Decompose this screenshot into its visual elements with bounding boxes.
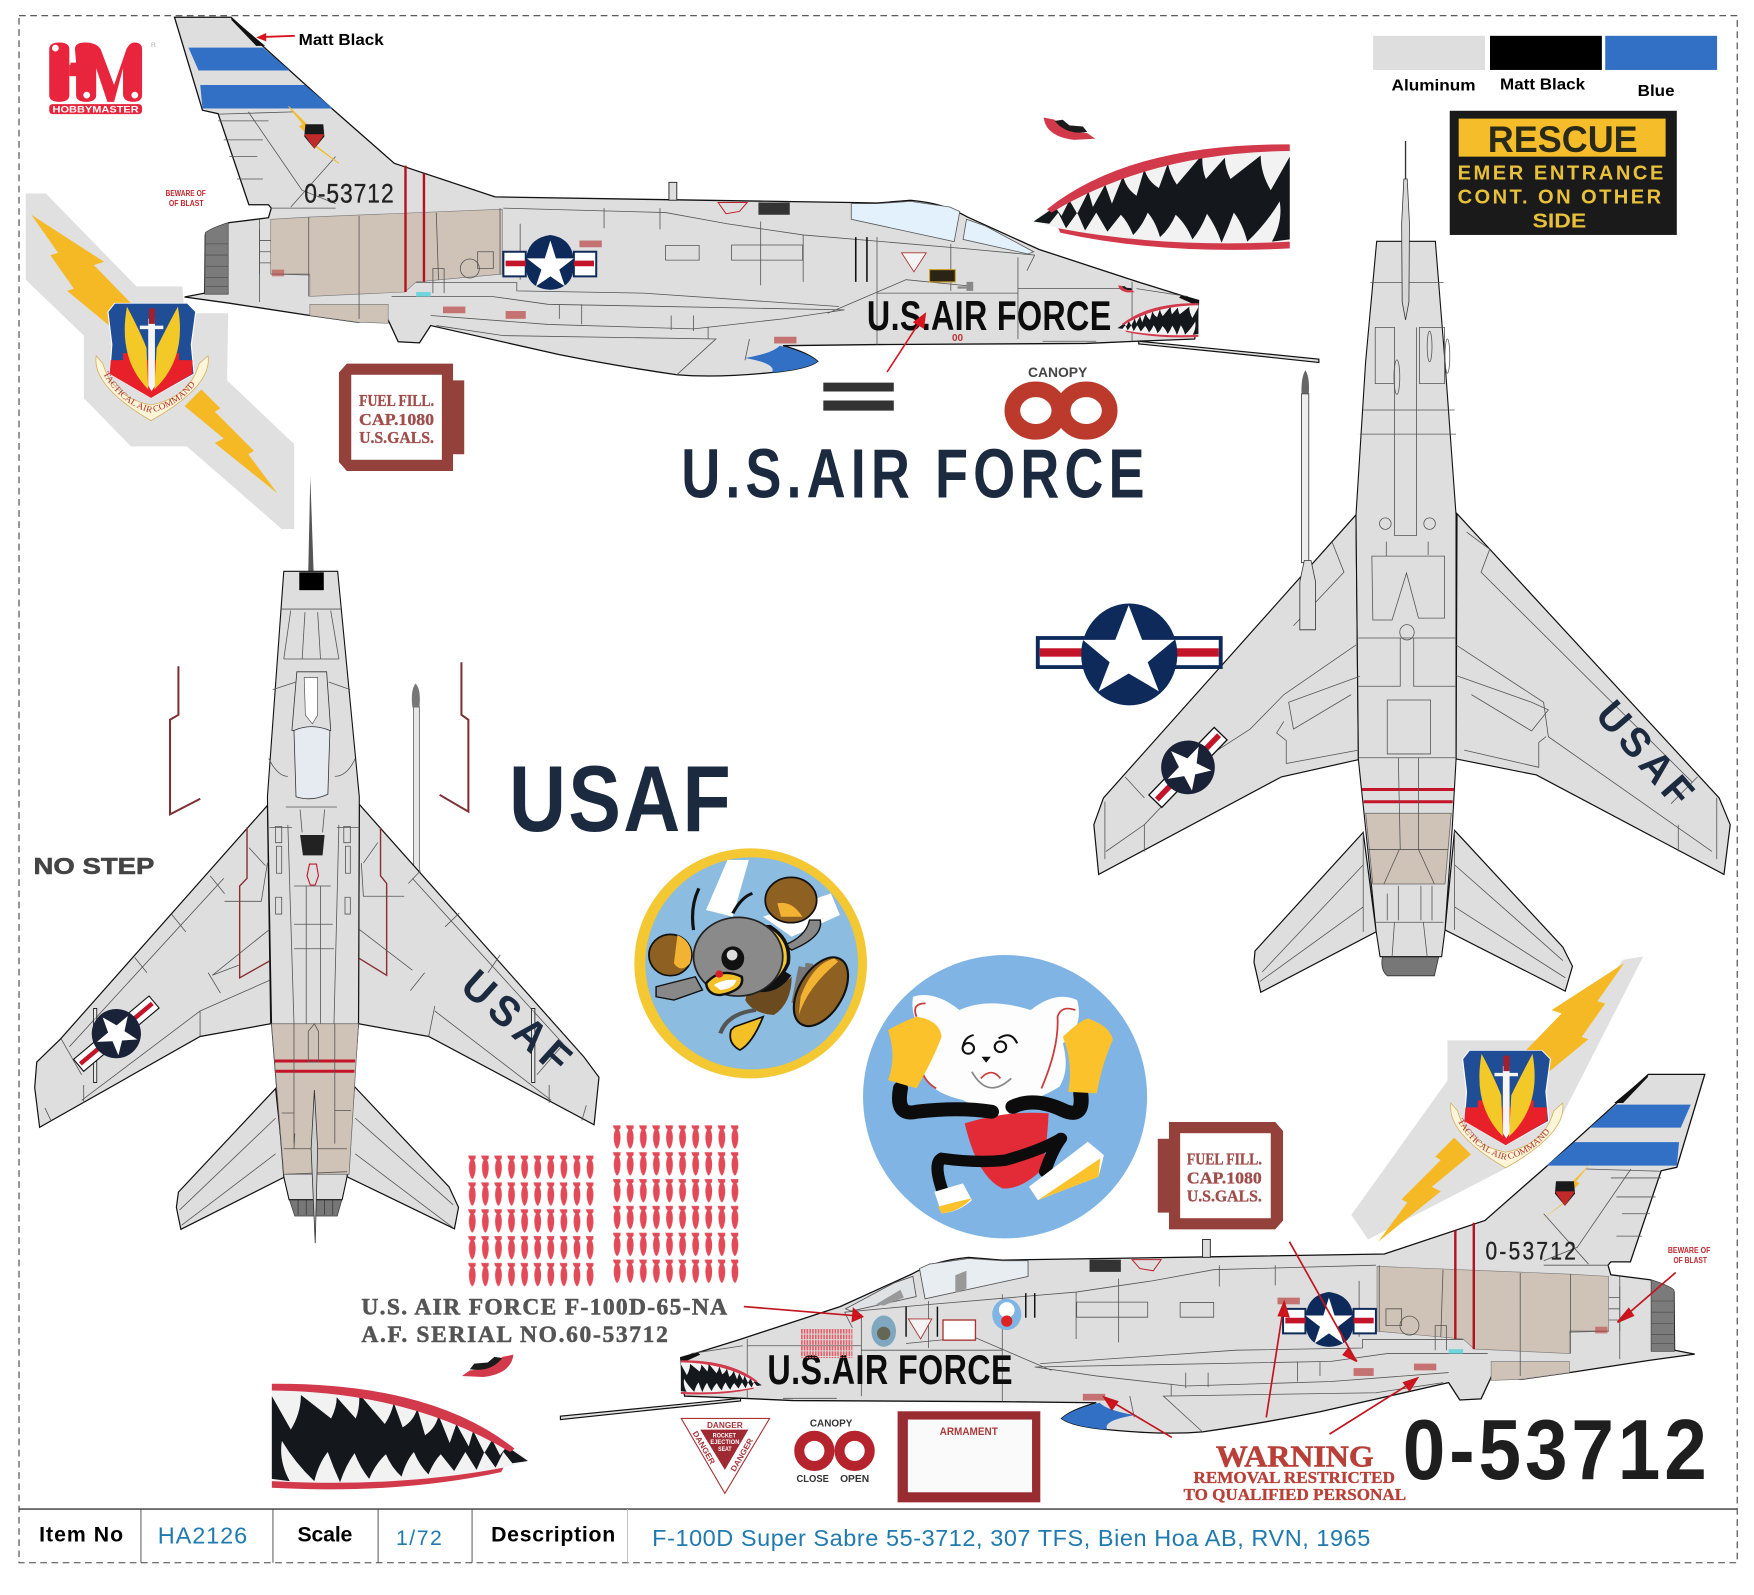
danger ejection seat triangle — [681, 1418, 770, 1493]
bottom jet: mini bee badge — [871, 1316, 896, 1347]
bomb mission tally — [465, 1124, 741, 1289]
beware of blast note: OF BLAST — [169, 198, 204, 208]
TAC emblem decal (left) — [26, 194, 294, 529]
red arrow to fuselage lettering — [887, 312, 926, 372]
logo: Hobbymaster — [49, 42, 156, 114]
top view: red bands — [275, 1061, 355, 1071]
item number value: HA2126 — [158, 1523, 247, 1549]
canopy marking (top): CANOPY — [1028, 365, 1087, 380]
top view: wing tip struts — [94, 1008, 535, 1082]
info table — [19, 1509, 1737, 1563]
top view: windscreen — [304, 677, 318, 724]
fuel fill placard (top): CAP.1080 — [359, 410, 434, 429]
colour swatches: Matt Black — [1500, 77, 1585, 94]
top view: antenna head — [412, 684, 420, 707]
mini rescue placard — [930, 270, 955, 282]
underside: right tailplane — [1445, 830, 1572, 991]
warning placard: REMOVAL RESTRICTED — [1194, 1468, 1395, 1487]
underside: tan heat-stained panel — [1366, 813, 1451, 884]
bottom jet: canopy pane — [920, 1258, 1028, 1299]
beware of blast note — [166, 188, 206, 208]
shark mouth decal (top) — [1034, 144, 1290, 250]
fin serial number: 0-53712 — [304, 179, 394, 209]
bottom jet: shark mouth — [681, 1360, 762, 1395]
scale value: 1/72 — [396, 1526, 442, 1550]
danger ejection seat triangle: DANGER — [691, 1429, 717, 1466]
canopy close/open marking: OPEN — [840, 1474, 869, 1485]
rescue placard: SIDE — [1533, 211, 1586, 233]
danger ejection seat triangle: ROCKET — [713, 1432, 736, 1439]
underside: left tailplane — [1254, 832, 1376, 992]
danger ejection seat triangle: DANGER — [729, 1436, 755, 1473]
nose eye decal — [1118, 285, 1135, 292]
warning placard — [1184, 1440, 1406, 1504]
fin shield — [304, 124, 324, 149]
underside: red bands — [1362, 790, 1454, 802]
underside: wing roundel — [1136, 715, 1240, 820]
red pointer arrows — [744, 1242, 1676, 1437]
TAC emblem decal (left): TACTICAL AIR COMMAND — [104, 370, 194, 413]
equals stencil marks — [823, 383, 894, 411]
description label: Description — [491, 1522, 615, 1546]
large lettering: USAF: USAF — [509, 747, 731, 852]
logo: Hobbymaster: R — [151, 42, 156, 49]
top view: panel lines — [45, 609, 586, 1228]
bottom jet: fin bolt — [1540, 1163, 1591, 1220]
top view: side outline decal (right) — [440, 662, 468, 812]
underside: nose probe — [1402, 141, 1409, 320]
mini canopy marking: 00 — [952, 333, 964, 344]
bottom jet: black lines — [906, 1293, 1035, 1337]
beware of blast note: BEWARE OF — [166, 188, 206, 198]
bottom jet: fuselage lettering: U.S.AIR FORCE — [767, 1346, 1013, 1393]
side view aircraft (bottom) — [560, 1074, 1705, 1433]
rescue placard: CONT. ON OTHER — [1458, 187, 1662, 209]
fuel fill placard (bottom): FUEL FILL. — [1187, 1150, 1262, 1169]
underside: fuselage — [1356, 241, 1456, 957]
large serial number: 0-53712 — [1403, 1403, 1707, 1498]
beware of blast note (bottom): BEWARE OF — [1668, 1245, 1710, 1255]
label: matt black arrow: Matt Black — [299, 32, 384, 49]
top view: red hatch outline — [307, 864, 318, 885]
top view: black nose panel — [299, 572, 324, 590]
underside: exhaust — [1382, 957, 1439, 976]
top view: nose probe — [308, 476, 314, 571]
rescue placard: EMER ENTRANCE — [1458, 163, 1663, 185]
panel black lines — [856, 237, 867, 282]
fuel fill placard (top): FUEL FILL. — [359, 391, 434, 410]
canopy close/open marking: CANOPY — [810, 1418, 853, 1429]
top view: wing walkway lines — [240, 827, 387, 978]
shark eye decal (top) — [1044, 117, 1095, 140]
top view: USAF wing lettering: USAF — [452, 960, 581, 1083]
no step marking: NO STEP — [34, 853, 154, 879]
rescue placard — [1450, 111, 1677, 235]
side view aircraft (top) — [175, 17, 1319, 376]
top view: tan heat-stained panel — [272, 1024, 358, 1174]
beware of blast note (bottom) — [1668, 1245, 1710, 1265]
warning placard: TO QUALIFIED PERSONAL — [1184, 1485, 1406, 1504]
description value: F-100D Super Sabre 55-3712, 307 TFS, Bien Hoa AB, RVN, 1965 — [652, 1525, 1370, 1551]
badge: boxing bear — [863, 955, 1147, 1238]
danger ejection seat triangle: EJECTION — [710, 1439, 740, 1446]
fuel fill placard (bottom): CAP.1080 — [1187, 1169, 1262, 1188]
TAC emblem decal (right) — [1352, 956, 1643, 1242]
bottom jet: mini bear badge — [992, 1299, 1021, 1330]
top view: wing roundel — [63, 983, 170, 1084]
fuel fill placard (top): U.S.GALS. — [359, 428, 434, 447]
mini danger triangle — [902, 253, 926, 272]
grey fitting — [958, 282, 973, 291]
colour swatches: Aluminum — [1392, 78, 1475, 95]
top view: hatches — [276, 826, 350, 914]
large lettering: U.S. AIR FORCE: U.S.AIR FORCE — [681, 436, 1145, 513]
danger ejection seat triangle: DANGER — [707, 1420, 743, 1430]
colour swatches: Blue — [1638, 83, 1675, 100]
bottom jet: canopy shadow — [876, 1271, 966, 1305]
underside: right wing — [1456, 514, 1730, 874]
fuselage side text: U.S.AIR FORCE — [867, 292, 1111, 339]
badge: boxing bee — [634, 848, 867, 1078]
top view: wing reference tubes — [414, 706, 419, 878]
armament placard: ARMAMENT — [940, 1426, 998, 1438]
bottom jet: windscreen — [846, 1276, 916, 1311]
canopy marking (top) — [1012, 365, 1110, 432]
large roundel decal — [1036, 604, 1223, 705]
top view: side outline decal (left) — [170, 666, 200, 814]
label: matt black arrow — [256, 32, 384, 49]
top plan view aircraft (left) — [35, 476, 599, 1243]
warning placard: WARNING — [1216, 1440, 1374, 1474]
top view: right tailplane — [347, 1086, 459, 1229]
rescue placard: RESCUE — [1488, 119, 1638, 160]
canopy close/open marking — [796, 1418, 870, 1485]
colour swatches — [1373, 36, 1717, 100]
top view: black panel — [300, 835, 325, 855]
shark mouth decal (bottom) — [272, 1384, 528, 1489]
logo: Hobbymaster: HOBBYMASTER — [53, 104, 139, 114]
top view: right wing — [358, 804, 599, 1125]
fuel fill placard (bottom): U.S.GALS. — [1187, 1186, 1262, 1205]
danger ejection seat triangle: SEAT — [718, 1446, 732, 1453]
top view: tail fin — [311, 1090, 318, 1243]
bottom jet: fin serial: 0-53712 — [1486, 1237, 1576, 1265]
beware of blast note (bottom): OF BLAST — [1673, 1255, 1708, 1265]
TAC emblem decal (right): TACTICAL AIR COMMAND — [1458, 1118, 1549, 1160]
bottom jet: mini bomb tally — [801, 1329, 852, 1358]
underside: panel lines — [1105, 283, 1717, 982]
fuel fill placard (bottom) — [1158, 1122, 1283, 1229]
underside: left wing — [1094, 515, 1358, 874]
fin bolt decal — [289, 106, 339, 163]
underside: USAF wing lettering: USAF — [1587, 691, 1704, 815]
top view: left tailplane — [176, 1089, 285, 1229]
bottom jet: mini armament panel — [943, 1320, 975, 1340]
nose shark mouth decal — [1117, 303, 1198, 337]
underside: lying pitot probe — [1300, 370, 1316, 630]
top view: fuselage — [267, 571, 359, 1200]
item number label: Item No — [39, 1522, 123, 1546]
fuel fill placard (top) — [339, 364, 464, 471]
top view: canopy glazing — [292, 672, 331, 730]
data stencil text — [361, 1294, 727, 1348]
canopy close/open marking: CLOSE — [796, 1474, 829, 1485]
bottom jet: mini danger triangle — [908, 1319, 932, 1339]
top view: canopy glass — [294, 727, 330, 799]
data stencil text: A.F. SERIAL NO.60-53712 — [361, 1322, 668, 1348]
scale label: Scale — [298, 1522, 353, 1546]
armament placard — [898, 1411, 1040, 1502]
shark eye decal (bottom) — [462, 1355, 513, 1377]
bottom jet: fin shield — [1555, 1181, 1575, 1206]
top view: left wing — [35, 805, 271, 1127]
underside plan view aircraft (right) — [1094, 241, 1730, 992]
data stencil text: U.S. AIR FORCE F-100D-65-NA — [361, 1294, 727, 1320]
top view: exhaust — [289, 1199, 342, 1216]
